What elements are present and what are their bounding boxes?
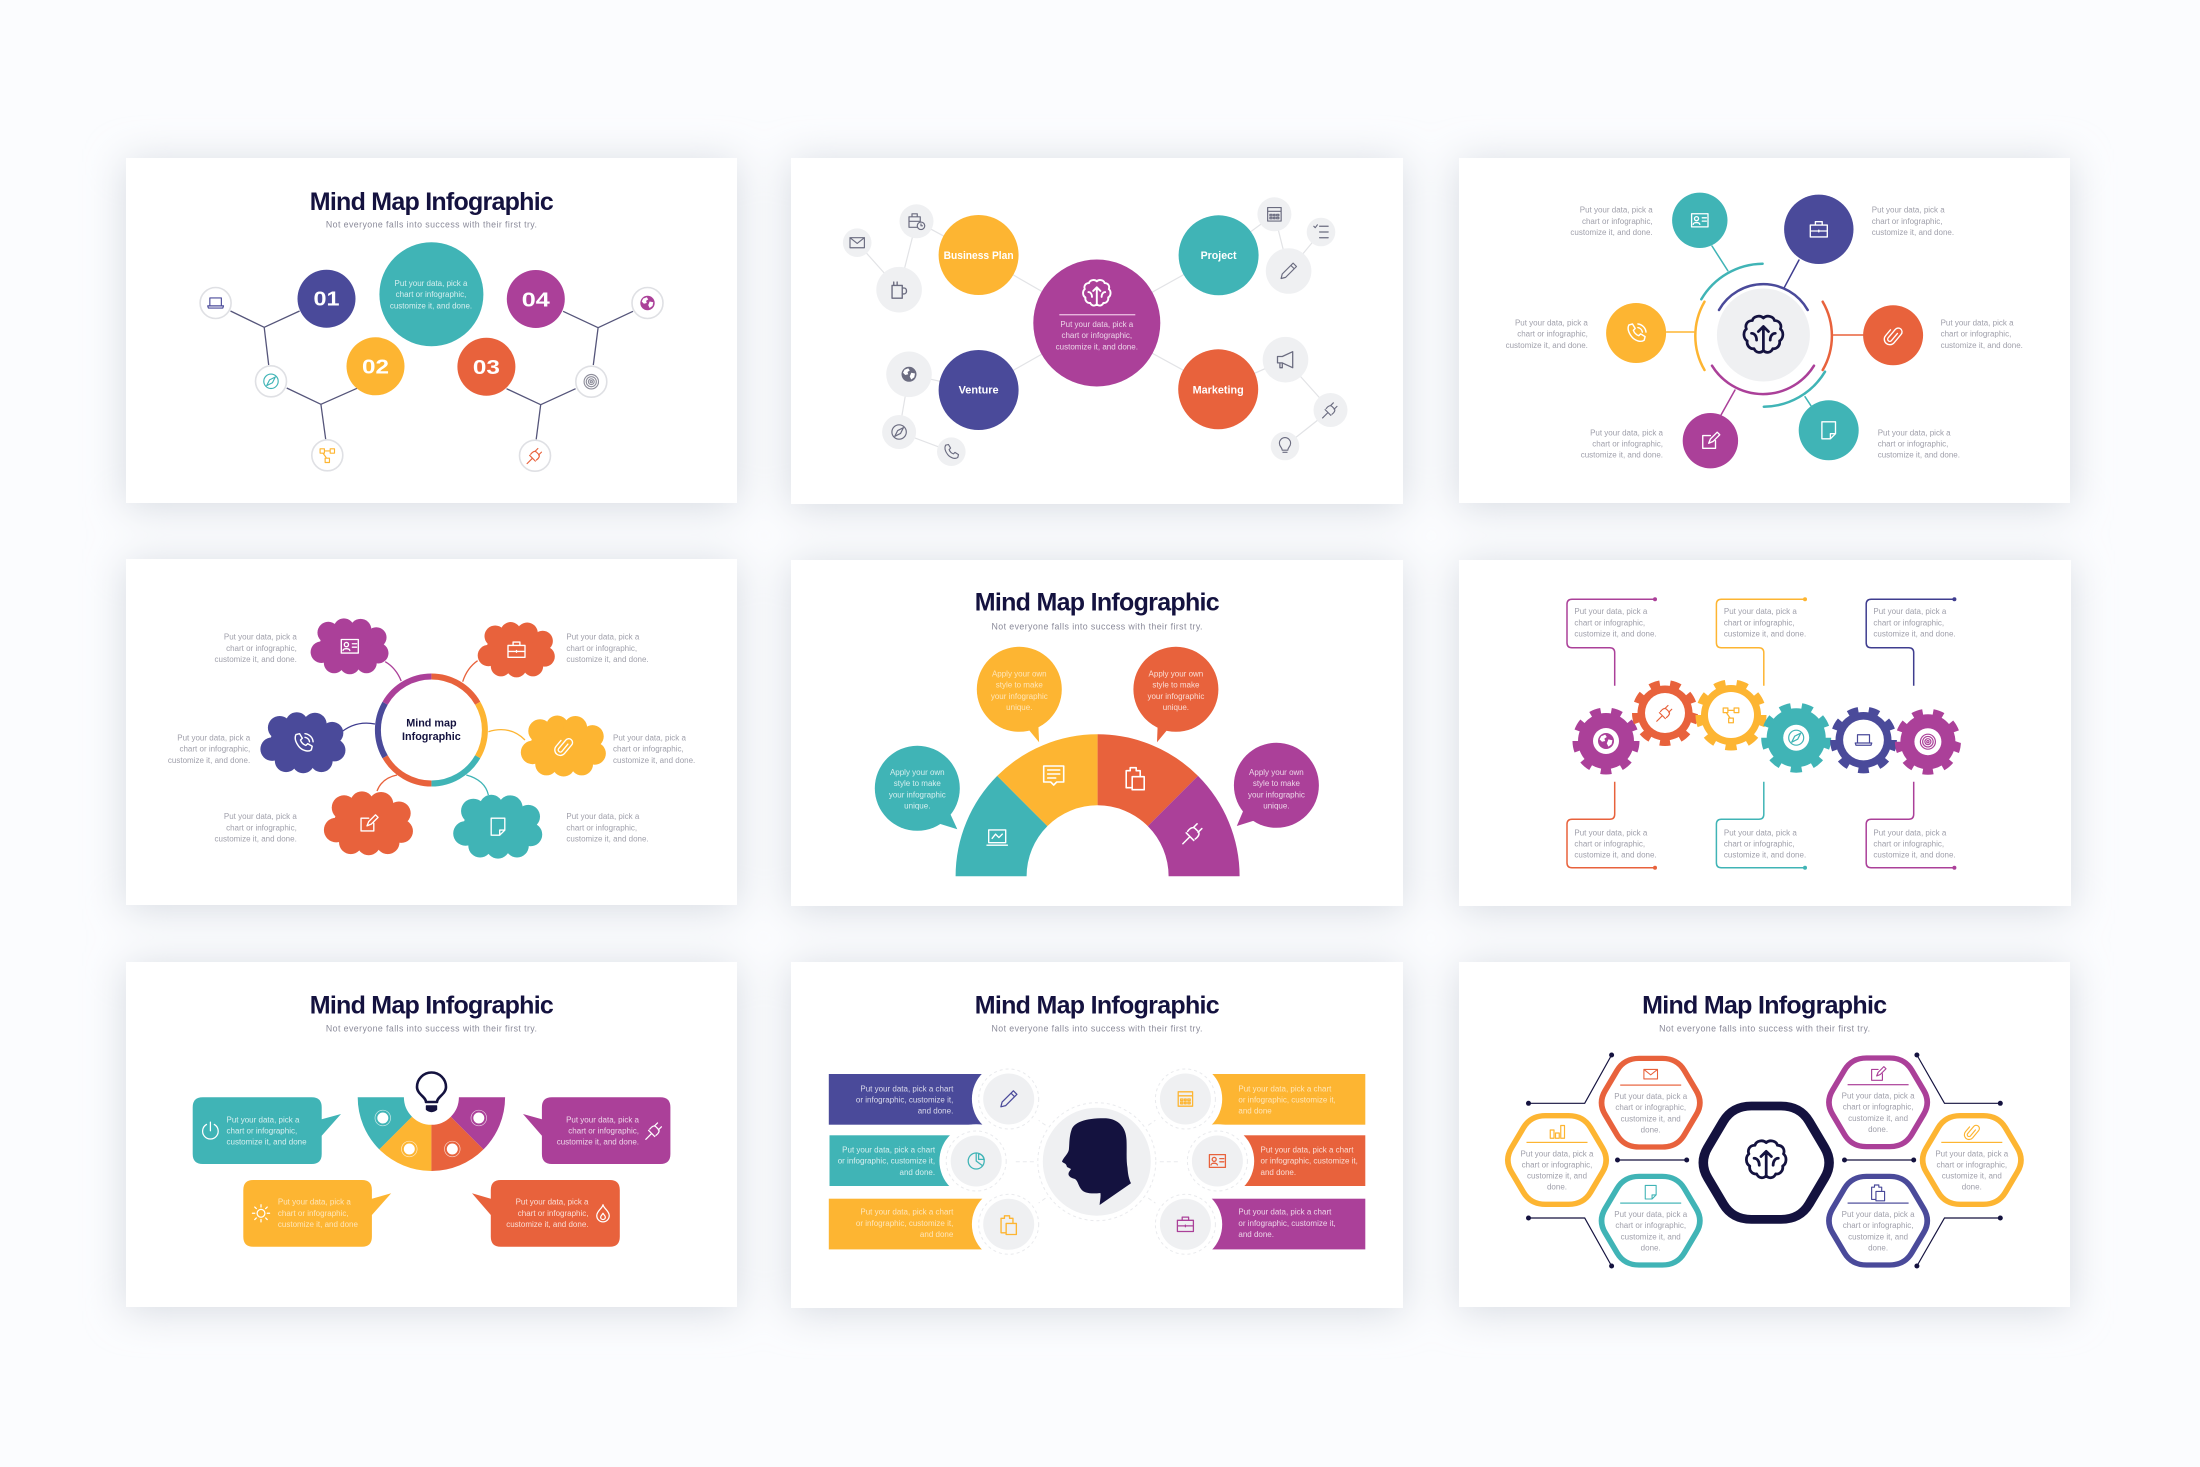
panel 3: brain with arcs <box>1459 158 2070 503</box>
arch segment: yellow <box>997 734 1098 826</box>
icon: brain <box>1744 316 1783 352</box>
descriptions: Put your data, pick a <box>1873 828 1947 837</box>
speech bubble: magenta: style to make <box>1253 779 1301 788</box>
bar texts: and done. <box>1238 1230 1274 1239</box>
fan segment: yellow <box>379 1117 431 1171</box>
title: Mind Map Infographic <box>1642 991 1887 1019</box>
gear: laptop <box>1834 711 1893 769</box>
descriptions: chart or infographic, <box>1582 217 1653 226</box>
hexagon: mail: Put your data, pick a <box>1614 1092 1688 1101</box>
topic: Marketing <box>1178 349 1258 429</box>
central ring <box>378 676 485 784</box>
central magenta circle: Put your data, pick a <box>1060 320 1134 329</box>
hexagon: clipboard: chart or infographic, <box>1843 1221 1913 1230</box>
descriptions: Put your data, pick a <box>566 812 640 821</box>
speech bubble: magenta <box>1234 743 1319 828</box>
speech bubble: yellow: your infographic <box>991 692 1048 701</box>
descriptions: Put your data, pick a <box>1574 828 1648 837</box>
arcs and connectors <box>1666 246 1864 415</box>
gear: globe <box>1576 712 1636 770</box>
descriptions: Put your data, pick a <box>1724 607 1797 616</box>
bar texts <box>838 1084 1358 1239</box>
callout: teal: customize it, and done <box>226 1138 307 1147</box>
bar texts: Put your data, pick a chart <box>860 1084 954 1093</box>
node: edit <box>1683 413 1738 468</box>
descriptions <box>1574 607 1956 860</box>
cloud: note <box>453 795 542 859</box>
topic: Venture: Venture <box>959 384 999 396</box>
cloud: briefcase <box>478 622 555 677</box>
descriptions: customize it, and done. <box>1581 451 1663 460</box>
bar texts: and done <box>920 1230 954 1239</box>
panel 6: gears <box>1459 560 2071 906</box>
hexagon: edit: customize it, and <box>1848 1114 1908 1123</box>
hexagon: note: done. <box>1641 1243 1661 1252</box>
descriptions: customize it, and done. <box>1506 341 1588 350</box>
fan segment: teal <box>358 1097 412 1149</box>
node 01 <box>298 270 356 328</box>
descriptions: chart or infographic, <box>1873 618 1944 627</box>
hexagon: paperclip <box>1923 1116 2021 1204</box>
callout: magenta: Put your data, pick a <box>566 1115 640 1124</box>
topic: Project <box>1179 215 1259 295</box>
cloud: phone <box>260 712 345 773</box>
arch segment: orange <box>1098 734 1198 826</box>
descriptions: customize it, and done. <box>566 835 649 844</box>
speech bubble: orange: your infographic <box>1147 692 1204 701</box>
descriptions: customize it, and done. <box>1724 851 1806 860</box>
bracket end dots <box>1653 597 1956 870</box>
callout: magenta: chart or infographic, <box>568 1126 639 1135</box>
central magenta circle: customize it, and done. <box>1056 342 1138 351</box>
speech bubble: teal <box>875 746 960 831</box>
hexagon: bars: chart or infographic, <box>1522 1160 1592 1169</box>
node 01: 01 <box>314 289 340 311</box>
bar texts: Put your data, pick a chart <box>860 1208 954 1217</box>
descriptions: Put your data, pick a <box>1590 428 1664 437</box>
descriptions: customize it, and done. <box>1570 228 1653 237</box>
descriptions: chart or infographic, <box>613 745 684 754</box>
descriptions: chart or infographic, <box>566 823 637 832</box>
node 02: 02 <box>362 356 389 378</box>
hexagon: note: customize it, and <box>1621 1232 1681 1241</box>
icon: plug <box>527 448 541 464</box>
topic: Marketing: Marketing <box>1193 384 1244 396</box>
bar texts: Put your data, pick a chart <box>1260 1146 1354 1155</box>
node: phone <box>1606 303 1666 363</box>
descriptions: chart or infographic, <box>1941 330 2011 339</box>
node 04 <box>507 270 565 328</box>
descriptions: Put your data, pick a <box>1873 607 1947 616</box>
bar texts: and done. <box>1260 1168 1296 1177</box>
bar texts: or infographic, customize it, <box>856 1096 953 1105</box>
descriptions: customize it, and done. <box>1873 629 1956 638</box>
descriptions: Put your data, pick a <box>1574 607 1648 616</box>
icon: compass <box>264 374 278 388</box>
icon: light bulb <box>417 1072 446 1112</box>
panel 7: light bulb fan with callouts <box>126 962 737 1307</box>
descriptions: chart or infographic, <box>1724 840 1795 849</box>
callout: orange <box>472 1180 620 1247</box>
gear: target <box>1899 713 1957 771</box>
centre label: Infographic <box>402 731 461 743</box>
node: id card <box>1672 193 1728 248</box>
fan dots <box>375 1110 487 1157</box>
connector lines <box>230 311 633 439</box>
hexagon: edit <box>1829 1058 1927 1147</box>
hexagon: mail: chart or infographic, <box>1615 1103 1686 1112</box>
node: briefcase <box>1784 195 1854 264</box>
hexagon: mail: done. <box>1641 1125 1661 1134</box>
callout: orange: customize it, and done. <box>506 1220 588 1229</box>
hexagon: note: chart or infographic, <box>1615 1221 1686 1230</box>
subtitle: Not everyone falls into success with their first try. <box>1659 1023 1870 1033</box>
speech bubble: magenta: your infographic <box>1248 790 1305 799</box>
gear: compass <box>1765 707 1827 769</box>
panel 8: head with bars <box>791 962 1403 1308</box>
speech bubble: orange: style to make <box>1152 681 1200 690</box>
subtitle: Not everyone falls into success with their first try. <box>326 1023 537 1033</box>
callout: magenta <box>523 1097 670 1164</box>
descriptions: customize it, and done. <box>1574 851 1657 860</box>
fan segment: magenta <box>451 1097 505 1149</box>
descriptions: chart or infographic, <box>566 644 637 653</box>
descriptions: customize it, and done. <box>168 756 250 765</box>
descriptions: Put your data, pick a <box>566 633 640 642</box>
bar texts: or infographic, customize it, <box>1238 1096 1336 1105</box>
subtitle: Not everyone falls into success with their first try. <box>992 622 1202 632</box>
descriptions: chart or infographic, <box>226 644 297 653</box>
descriptions: customize it, and done. <box>566 655 649 664</box>
arch icons <box>987 766 1202 845</box>
hexagon: bars <box>1508 1116 1606 1204</box>
icon: globe <box>640 296 655 310</box>
subtitle: Not everyone falls into success with their first try. <box>992 1023 1202 1033</box>
descriptions <box>1506 206 2023 460</box>
gear: nodes <box>1700 684 1762 746</box>
descriptions: customize it, and done. <box>1878 451 1960 460</box>
centre circle <box>1717 288 1810 382</box>
circle icons <box>968 1091 1225 1234</box>
grey icon circles <box>951 1074 1243 1250</box>
descriptions: customize it, and done. <box>215 655 297 664</box>
title: Mind Map Infographic <box>975 991 1220 1019</box>
icon: laptop <box>208 298 224 308</box>
descriptions: customize it, and done. <box>1873 851 1956 860</box>
icon: target <box>584 374 598 389</box>
descriptions: chart or infographic, <box>1574 840 1645 849</box>
cloud: id card <box>311 618 389 674</box>
hexagon: clipboard: customize it, and <box>1848 1232 1908 1241</box>
descriptions: Put your data, pick a <box>1878 428 1951 437</box>
bar texts: Put your data, pick a chart <box>1238 1084 1332 1093</box>
descriptions: chart or infographic, <box>1872 217 1943 226</box>
central teal circle: Put your data, pick a <box>395 279 468 288</box>
hexagon: paperclip: done. <box>1962 1183 1982 1192</box>
head silhouette <box>1062 1118 1131 1205</box>
bar texts: or infographic, customize it, <box>838 1157 935 1166</box>
descriptions: Put your data, pick a <box>1872 206 1945 215</box>
descriptions: Put your data, pick a <box>613 734 686 743</box>
speech bubble: orange: unique. <box>1163 703 1189 712</box>
descriptions: Put your data, pick a <box>224 812 297 821</box>
central teal circle: customize it, and done. <box>390 301 472 310</box>
central magenta circle: chart or infographic, <box>1061 331 1132 340</box>
topic: Project: Project <box>1201 250 1237 262</box>
hexagon: edit: chart or infographic, <box>1843 1103 1913 1112</box>
bar texts: and done <box>1238 1107 1272 1116</box>
hexagon: bars: done. <box>1547 1183 1567 1192</box>
speech bubble: teal: your infographic <box>889 790 946 799</box>
descriptions: customize it, and done. <box>1941 341 2023 350</box>
descriptions: chart or infographic, <box>179 745 250 754</box>
descriptions: customize it, and done. <box>215 835 297 844</box>
hexagon: bars: Put your data, pick a <box>1521 1149 1594 1158</box>
central teal circle: chart or infographic, <box>396 290 466 299</box>
speech bubble: yellow: Apply your own <box>992 669 1047 678</box>
node: note <box>1799 400 1859 460</box>
dashed rings <box>946 1069 1247 1254</box>
callout: orange: chart or infographic, <box>518 1209 588 1218</box>
dashed connectors <box>976 1099 1217 1224</box>
hexagon: paperclip: Put your data, pick a <box>1935 1149 2009 1158</box>
panel 5: arch with speech bubbles <box>791 560 1403 906</box>
speech bubble: teal: Apply your own <box>890 768 945 777</box>
arch segment: magenta <box>1148 776 1240 876</box>
descriptions: Put your data, pick a <box>1724 828 1797 837</box>
centre label: Mind map <box>406 718 457 730</box>
descriptions: chart or infographic, <box>1592 439 1663 448</box>
hexagon: note: Put your data, pick a <box>1614 1210 1688 1219</box>
panel 1: numbered mind map <box>126 158 737 503</box>
callout: yellow: customize it, and done <box>278 1220 358 1229</box>
node 03 <box>457 338 515 396</box>
speech bubble: teal: unique. <box>904 802 930 811</box>
speech bubble: yellow: style to make <box>996 681 1043 690</box>
hexagon: paperclip: chart or infographic, <box>1936 1160 2007 1169</box>
callout: yellow: chart or infographic, <box>278 1209 349 1218</box>
arch segment: teal <box>956 776 1047 876</box>
callout: teal: chart or infographic, <box>226 1126 297 1135</box>
connector lines <box>857 214 1330 452</box>
hexagon: paperclip: customize it, and <box>1942 1172 2002 1181</box>
panel 4: clouds <box>126 559 737 905</box>
grey icon circles <box>843 197 1348 466</box>
node 02 <box>346 337 404 395</box>
small icon circles <box>200 288 663 471</box>
grey line icons <box>850 208 1337 458</box>
callout: yellow: Put your data, pick a <box>278 1198 351 1207</box>
curved connectors <box>339 661 525 795</box>
hexagon: note <box>1602 1176 1700 1265</box>
descriptions <box>168 633 695 844</box>
hexagon: mail <box>1602 1058 1700 1147</box>
bar texts: or infographic, customize it, <box>1238 1219 1336 1228</box>
descriptions: customize it, and done. <box>613 756 695 765</box>
panel shadows <box>126 162 2071 1312</box>
descriptions: chart or infographic, <box>1724 618 1795 627</box>
callout: teal: Put your data, pick a <box>226 1115 300 1124</box>
node 04: 04 <box>522 290 551 312</box>
descriptions: Put your data, pick a <box>224 633 297 642</box>
descriptions: Put your data, pick a <box>1941 319 2014 328</box>
speech bubble: teal: style to make <box>894 779 941 788</box>
callout: magenta: customize it, and done. <box>557 1138 639 1147</box>
hexagon: edit: done. <box>1868 1125 1888 1134</box>
descriptions: Put your data, pick a <box>1515 319 1588 328</box>
speech bubble: yellow: unique. <box>1006 703 1032 712</box>
topic: Venture <box>939 350 1019 430</box>
central magenta circle <box>1033 260 1160 386</box>
bar texts: or infographic, customize it, <box>856 1219 953 1228</box>
hexagon: bars: customize it, and <box>1527 1172 1587 1181</box>
panel 9: hexagons <box>1459 962 2070 1307</box>
bar texts: Put your data, pick a chart <box>842 1146 936 1155</box>
speech bubble: orange <box>1133 647 1218 742</box>
callout: yellow <box>243 1180 391 1247</box>
speech bubble: magenta: unique. <box>1263 802 1290 811</box>
icon: nodes <box>320 449 334 462</box>
bars <box>829 1074 1365 1249</box>
bracket lines <box>1567 599 1954 868</box>
descriptions: Put your data, pick a <box>177 734 251 743</box>
callout: teal <box>193 1097 341 1164</box>
speech bubble: magenta: Apply your own <box>1249 768 1304 777</box>
descriptions: customize it, and done. <box>1724 629 1806 638</box>
central teal circle <box>379 242 483 346</box>
title: Mind Map Infographic <box>310 188 554 216</box>
bar texts: Put your data, pick a chart <box>1238 1208 1332 1217</box>
topic: Business Plan <box>939 215 1019 295</box>
title: Mind Map Infographic <box>310 991 554 1019</box>
descriptions: chart or infographic, <box>1517 330 1588 339</box>
descriptions: customize it, and done. <box>1872 228 1954 237</box>
hexagon: clipboard: Put your data, pick a <box>1842 1210 1915 1219</box>
bar texts: and done. <box>918 1107 953 1116</box>
panel 2: topic bubbles <box>791 158 1403 504</box>
cloud: paperclip <box>521 716 606 776</box>
node: paperclip <box>1863 305 1923 365</box>
descriptions: chart or infographic, <box>1574 618 1645 627</box>
descriptions: chart or infographic, <box>226 823 297 832</box>
central hexagon <box>1703 1106 1829 1219</box>
white notches <box>939 1062 1254 1261</box>
topic: Business Plan: Business Plan <box>944 250 1014 262</box>
connectors with dots <box>1526 1052 2003 1268</box>
callout: orange: Put your data, pick a <box>516 1198 589 1207</box>
descriptions: chart or infographic, <box>1878 439 1948 448</box>
descriptions: Put your data, pick a <box>1580 206 1653 215</box>
bar texts: and done. <box>900 1168 935 1177</box>
descriptions: customize it, and done. <box>1574 629 1657 638</box>
gear: plug <box>1636 684 1694 742</box>
speech bubble: yellow <box>977 647 1062 742</box>
bar texts: or infographic, customize it, <box>1260 1157 1358 1166</box>
speech bubble: orange: Apply your own <box>1149 669 1203 678</box>
hexagon: edit: Put your data, pick a <box>1842 1092 1915 1101</box>
hexagon: mail: customize it, and <box>1621 1114 1681 1123</box>
fan segment: orange <box>431 1117 484 1171</box>
subtitle: Not everyone falls into success with their first try. <box>326 220 537 230</box>
hexagon: clipboard: done. <box>1868 1243 1888 1252</box>
title: Mind Map Infographic <box>975 589 1220 617</box>
cloud: edit <box>324 791 413 855</box>
descriptions: chart or infographic, <box>1873 840 1944 849</box>
node 03: 03 <box>473 357 500 379</box>
hexagon: clipboard <box>1829 1176 1927 1265</box>
